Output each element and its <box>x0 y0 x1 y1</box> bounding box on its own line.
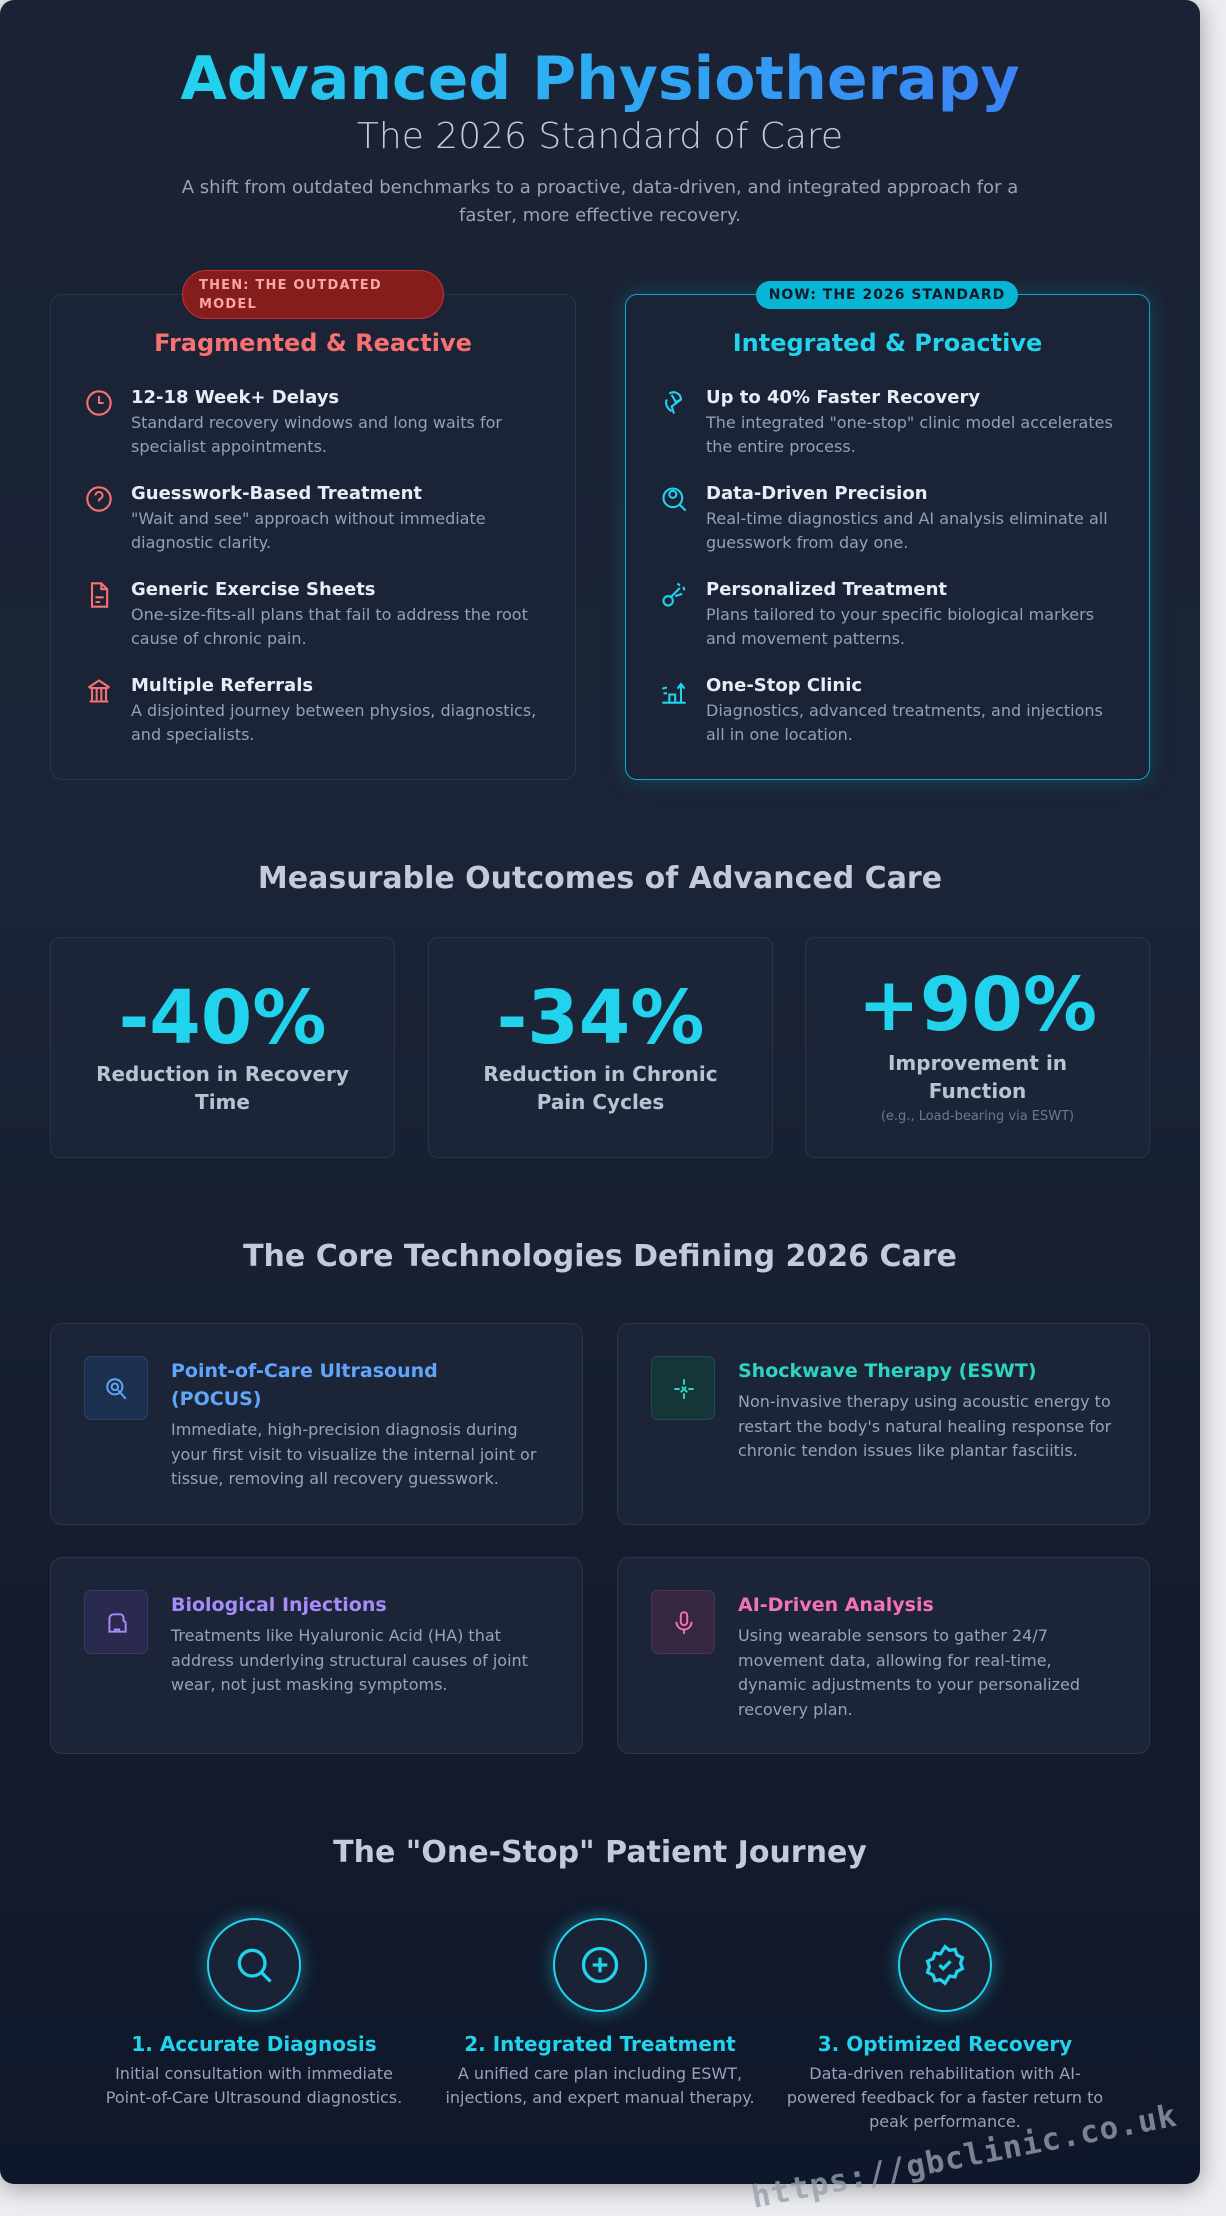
step 1: Initial consultation with immediate Point-of-Care Ultrasound diagnostics. <box>106 2064 402 2107</box>
step 3 <box>787 1908 1103 2131</box>
item: generic sheets <box>90 579 528 648</box>
tech: AI: AI-Driven Analysis <box>738 1594 934 1616</box>
item: precision <box>662 483 1108 552</box>
heading: journey: The "One-Stop" Patient Journey <box>333 1835 867 1870</box>
badge: now <box>756 281 1018 309</box>
item: guesswork <box>86 483 486 552</box>
tech: AI: Using wearable sensors to gather 24/7 movement data, allowing for real-time, dynamic adjustments to your personalized recovery plan. <box>738 1626 1080 1718</box>
heading: integrated: Integrated & Proactive <box>733 329 1042 357</box>
heading: technologies: The Core Technologies Defining 2026 Care <box>243 1239 957 1274</box>
panel: then: 12-18 Week+ Delays <box>131 387 339 408</box>
title: Advanced Physiotherapy <box>180 44 1020 114</box>
stat: recovery time: Reduction in Recovery <box>96 1062 349 1086</box>
stat: chronic pain: -34% <box>497 975 704 1061</box>
step 2: 2. Integrated Treatment <box>464 2032 736 2056</box>
badge: now: NOW: THE 2026 STANDARD <box>769 287 1005 303</box>
panel: then: Guesswork-Based Treatment <box>131 483 422 504</box>
tech: POCUS: Immediate, high-precision diagnosis during your first visit to visualize the internal joint or tissue, removing all recovery guesswork. <box>171 1420 536 1488</box>
panel: now <box>625 294 1150 780</box>
panel: then: Standard recovery windows and long waits for specialist appointments. <box>131 413 502 456</box>
panel: now: Personalized Treatment <box>706 579 947 600</box>
heading: outcomes: Measurable Outcomes of Advanced Care <box>258 861 942 896</box>
panel: then: A disjointed journey between physios, diagnostics, and specialists. <box>131 701 536 744</box>
tech: ESWT <box>617 1323 1150 1525</box>
tech: POCUS: Point-of-Care Ultrasound (POCUS) <box>171 1360 438 1410</box>
badge: then: THEN: THE OUTDATED MODEL <box>199 278 382 312</box>
watermark: https://gbclinic.co.uk <box>749 2098 1180 2216</box>
panel: now: Plans tailored to your specific biological markers and movement patterns. <box>706 605 1094 648</box>
tech: ESWT: Shockwave Therapy (ESWT) <box>738 1360 1037 1382</box>
heading: fragmented: Fragmented & Reactive <box>154 329 472 357</box>
panel: then: Multiple Referrals <box>131 675 313 696</box>
step 1 <box>106 1908 402 2107</box>
stat: function <box>805 937 1150 1158</box>
tech: injections: Biological Injections <box>171 1594 387 1616</box>
panel: then <box>50 294 576 780</box>
step 3: Data-driven rehabilitation with AI-powered feedback for a faster return to peak performance. <box>787 2064 1103 2131</box>
tech: POCUS <box>50 1323 583 1525</box>
subtitle: The 2026 Standard of Care <box>357 116 843 157</box>
panel: then: One-size-fits-all plans that fail to address the root cause of chronic pain. <box>131 605 528 648</box>
step 2: A unified care plan including ESWT, injections, and expert manual therapy. <box>445 2064 755 2107</box>
panel: now: Real-time diagnostics and AI analysis eliminate all guesswork from day one. <box>706 509 1108 552</box>
panel: then: Generic Exercise Sheets <box>131 579 376 600</box>
step 3: 3. Optimized Recovery <box>818 2032 1072 2056</box>
panel: now: Data-Driven Precision <box>706 483 928 504</box>
step 2 <box>445 1908 755 2107</box>
stat: chronic pain: Reduction in Chronic <box>483 1062 718 1086</box>
stat: recovery time: -40% <box>119 975 326 1061</box>
stat: recovery time <box>50 937 395 1158</box>
stat: chronic pain <box>428 937 773 1158</box>
panel: now: One-Stop Clinic <box>706 675 862 696</box>
stat: recovery time: Time <box>195 1090 250 1114</box>
stat: function: +90% <box>858 962 1097 1048</box>
stat: function: Function <box>929 1079 1026 1103</box>
badge: then <box>182 270 444 319</box>
panel: now: Up to 40% Faster Recovery <box>706 387 980 408</box>
stat: function: Improvement in <box>888 1051 1067 1075</box>
item: delays <box>86 387 502 456</box>
panel: then: "Wait and see" approach without immediate diagnostic clarity. <box>131 509 486 552</box>
item: faster <box>665 387 1113 456</box>
panel: now: Diagnostics, advanced treatments, and injections all in one location. <box>706 701 1103 744</box>
tech: AI <box>617 1557 1150 1754</box>
stat: function: (e.g., Load-bearing via ESWT) <box>881 1109 1074 1124</box>
item: one-stop <box>662 675 1103 744</box>
tech: injections <box>50 1557 583 1754</box>
tech: injections: Treatments like Hyaluronic Acid (HA) that address underlying structural causes of joint wear, not just masking symptoms. <box>171 1626 528 1694</box>
panel: now: The integrated "one-stop" clinic model accelerates the entire process. <box>706 413 1113 456</box>
intro text: A shift from outdated benchmarks to a proactive, data-driven, and integrated approach for a faster, more effective recovery. <box>182 177 1018 226</box>
item: referrals <box>88 675 536 744</box>
step 1: 1. Accurate Diagnosis <box>131 2032 377 2056</box>
tech: ESWT: Non-invasive therapy using acoustic energy to restart the body's natural healing response for chronic tendon issues like plantar fasciitis. <box>738 1392 1111 1460</box>
item: personalized <box>662 579 1094 648</box>
stat: chronic pain: Pain Cycles <box>537 1090 664 1114</box>
